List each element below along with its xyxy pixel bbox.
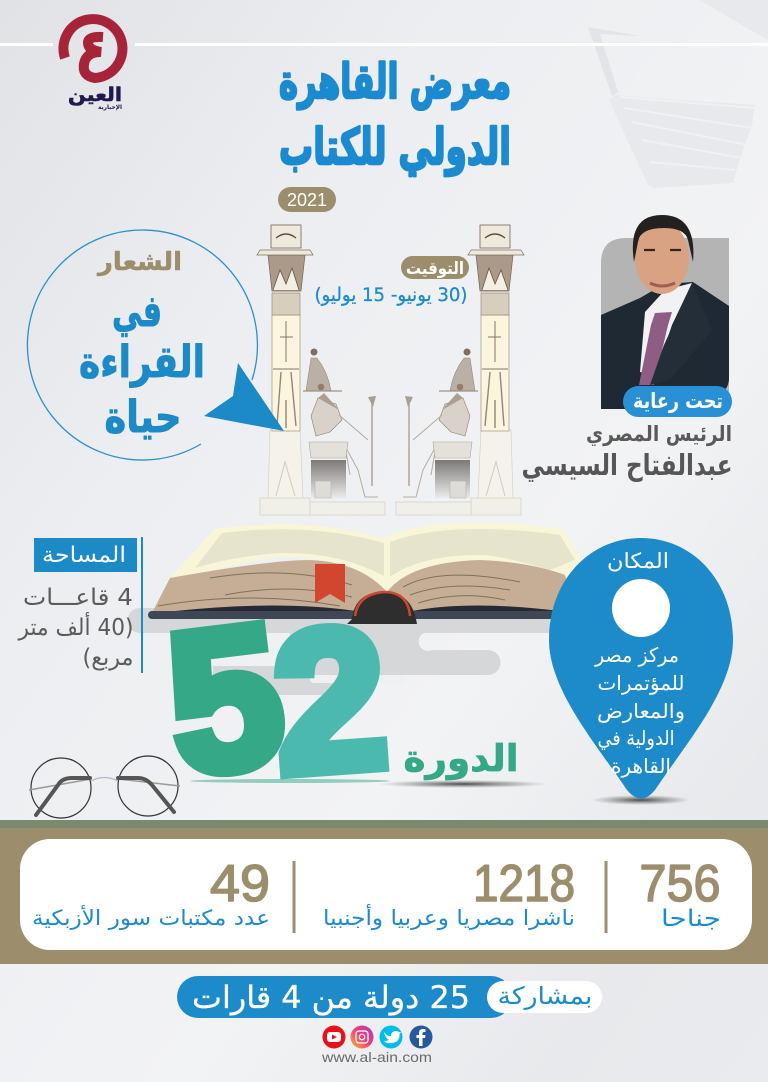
timing xyxy=(314,256,469,306)
shadow under edition xyxy=(190,779,548,788)
venue text: الدولية في xyxy=(598,726,674,751)
portrait xyxy=(601,215,729,409)
website: www.al-ain.com xyxy=(321,1049,432,1065)
title line two: الدولي للكتاب xyxy=(279,118,511,177)
slogan line three: حياة xyxy=(104,392,182,443)
watermark: open book xyxy=(588,0,768,188)
participation banner: 25 دولة من 4 قارات xyxy=(192,980,470,1016)
area text line one: 4 قاعـــات xyxy=(23,585,133,611)
venue text xyxy=(594,643,685,778)
venue text: والمعارض xyxy=(597,699,685,723)
digit five: 5 xyxy=(157,583,294,817)
patronage xyxy=(522,386,732,482)
area text line two: (40 ألف متر xyxy=(18,612,134,641)
slogan callout xyxy=(27,230,284,460)
area heading xyxy=(34,538,137,572)
timing dates: (30 يونيو- 15 يوليو) xyxy=(314,284,468,306)
edition number xyxy=(157,583,518,817)
glasses xyxy=(29,756,180,818)
participation label xyxy=(487,981,602,1013)
stat: publishers: 1218 xyxy=(473,855,575,913)
logo tagline: الإخبارية xyxy=(98,104,122,111)
timing: التوقيت xyxy=(406,259,464,279)
slogan line one: في xyxy=(112,286,162,337)
title line one: معرض القاهرة xyxy=(279,54,511,110)
illustration: left pillar and seated figure xyxy=(257,225,385,515)
book spine xyxy=(347,592,417,624)
patronage badge xyxy=(623,386,732,417)
slogan heading: الشعار xyxy=(96,247,182,276)
title xyxy=(279,54,511,177)
venue heading: المكان xyxy=(607,549,669,573)
slogan line two: القراءة xyxy=(79,337,205,388)
stats panel xyxy=(20,839,752,950)
stat: publishers xyxy=(323,855,575,930)
open book xyxy=(148,522,592,624)
stats band xyxy=(0,820,768,964)
logo wordmark: العين xyxy=(68,84,122,106)
area block: المساحة xyxy=(42,543,126,568)
area divider xyxy=(141,537,143,673)
icon: youtube xyxy=(322,1026,346,1048)
edition label: الدورة xyxy=(404,737,518,780)
icon: facebook xyxy=(410,1026,432,1048)
stat: bookshops xyxy=(32,855,270,930)
icon: twitter xyxy=(380,1026,402,1048)
callout circle xyxy=(27,230,257,460)
stat: publishers: ناشرا مصريا وعربيا وأجنبيا xyxy=(323,904,575,930)
logo ring and letter xyxy=(63,19,122,78)
year badge: 2021 xyxy=(287,190,327,210)
participation banner: بمشاركة xyxy=(498,982,592,1010)
patronage: تحت رعاية xyxy=(633,389,723,413)
participation banner xyxy=(177,976,602,1018)
pin shadow xyxy=(591,795,691,805)
bookmark xyxy=(315,564,345,603)
illustration: right pillar and seated figure xyxy=(396,225,524,515)
area text line three: مربع) xyxy=(82,645,134,671)
stat: bookshops: عدد مكتبات سور الأزبكية xyxy=(32,905,270,930)
clouds xyxy=(128,608,550,695)
venue pin xyxy=(549,538,733,798)
logo: Al-Ain xyxy=(63,19,122,106)
venue text: للمؤتمرات xyxy=(598,671,684,695)
stat: bookshops: 49 xyxy=(210,855,270,913)
pin hole xyxy=(612,579,670,637)
callout pointer xyxy=(204,363,284,431)
social icons xyxy=(322,1026,432,1048)
header rule xyxy=(0,43,768,46)
venue text: القاهرة xyxy=(611,754,671,778)
icon: instagram xyxy=(350,1026,374,1048)
timing label xyxy=(401,256,469,279)
year badge xyxy=(278,187,336,212)
area block xyxy=(18,537,143,673)
patron title: الرئيس المصري xyxy=(586,422,732,447)
stat: pavilions: جناحا xyxy=(661,906,721,932)
venue text: مركز مصر xyxy=(594,643,679,667)
digit two: 2 xyxy=(267,586,393,816)
stat: pavilions: 756 xyxy=(640,855,720,913)
